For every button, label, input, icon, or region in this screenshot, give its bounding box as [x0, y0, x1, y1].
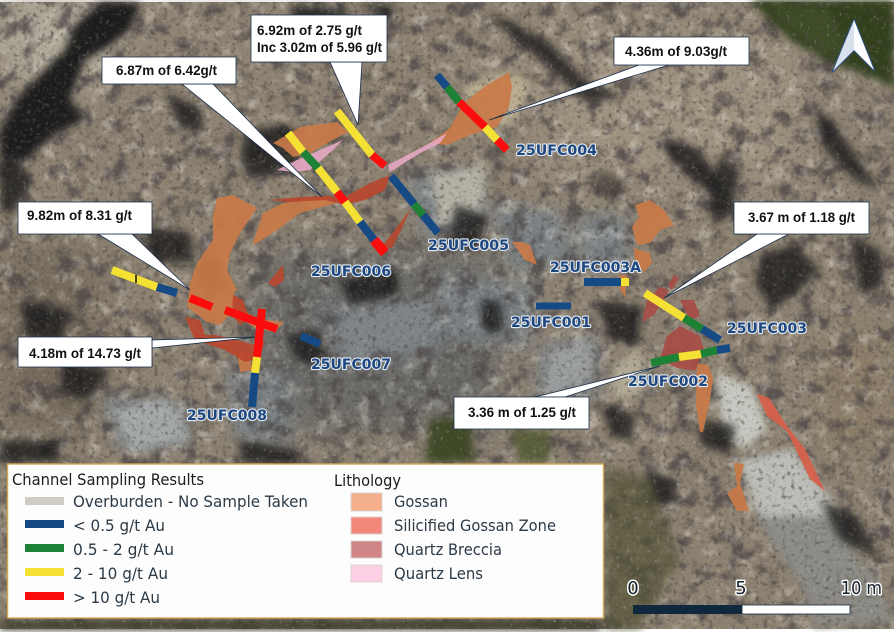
label 25UFC001: 25UFC001: [511, 315, 591, 331]
callout: 6.87m of 6.42g/t: [102, 57, 236, 84]
legend: under 0.5 g/t: < 0.5 g/t Au: [73, 516, 165, 535]
quartz breccia: [642, 275, 704, 371]
scale label 5: 5: [735, 578, 747, 599]
callout: 9.82m of 8.31 g/t: [18, 202, 152, 234]
channel 25UFC004: [437, 75, 507, 150]
gossan zones: [187, 72, 749, 511]
label 25UFC006: 25UFC006: [311, 264, 391, 280]
callout: 6.87m of 6.42g/t: 6.87m of 6.42g/t: [116, 62, 217, 78]
silicified gossan zones: [185, 175, 825, 491]
legend: quartz breccia: Quartz Breccia: [394, 540, 502, 559]
callout: 6.92m of 2.75 g/t: [251, 15, 387, 62]
legend: gossan: [351, 492, 448, 511]
legend: 0.5 to 2 g/t: [25, 540, 174, 559]
callout: 9.82m of 8.31 g/t: 9.82m of 8.31 g/t: [27, 207, 132, 223]
label 25UFC003A: 25UFC003A: [550, 260, 641, 276]
callout: 3.36 m of 1.25 g/t: 3.36 m of 1.25 g/t: [468, 404, 576, 420]
tail: 4.18m: [152, 337, 257, 348]
quartz lens: [277, 133, 447, 172]
label 25UFC003: 25UFC003: [727, 321, 807, 337]
legend: overburden: Overburden - No Sample Taken: [73, 492, 308, 511]
callout tails: [98, 62, 789, 397]
legend: 0.5 to 2 g/t: 0.5 - 2 g/t Au: [73, 540, 174, 559]
legend: 2 to 10 g/t: 2 - 10 g/t Au: [73, 564, 168, 583]
legend: gossan: Gossan: [394, 492, 448, 511]
channel 25UFC001: [536, 302, 571, 310]
callout: 3.67 m of 1.18 g/t: [734, 202, 869, 234]
callout: 4.36m of 9.03g/t: 4.36m of 9.03g/t: [625, 43, 727, 59]
channel labels: [187, 143, 807, 424]
callout: 6.92m of 2.75 g/t: 6.92m of 2.75 g/t: [257, 22, 362, 38]
callout: 3.67 m of 1.18 g/t: 3.67 m of 1.18 g/t: [748, 209, 855, 225]
heading: lithology: Lithology: [334, 471, 401, 490]
callout: 4.18m of 14.73 g/t: 4.18m of 14.73 g/t: [29, 345, 141, 361]
channel 25UFC007: [301, 336, 320, 344]
channel 25UFC003: [645, 293, 720, 340]
legend: quartz breccia: [351, 540, 502, 559]
channel sample lines: [112, 75, 730, 407]
label 25UFC008: 25UFC008: [187, 408, 267, 424]
icon: north arrow: [833, 20, 874, 71]
legend: 2 to 10 g/t: [25, 564, 168, 583]
tail: 6.92m: [330, 62, 362, 125]
channel 25UFC005: [337, 111, 438, 233]
tail: 6.87m: [182, 84, 322, 197]
lithology polygons: [185, 72, 825, 511]
legend: quartz lens: [351, 564, 483, 583]
scale label 10 m: 10 m: [841, 578, 882, 599]
label 25UFC007: 25UFC007: [311, 357, 391, 373]
channel 25UFC003A: [584, 278, 629, 286]
scale bar: [627, 578, 882, 614]
callout: 4.36m of 9.03g/t: [614, 37, 749, 65]
callout: 6.92m of 2.75 g/t: Inc 3.02m of 5.96 g/t: [257, 39, 382, 55]
label 25UFC004: 25UFC004: [516, 143, 597, 159]
panel: legend: [8, 464, 604, 618]
scale label 0: 0: [627, 578, 639, 599]
tail: 3.36m: [535, 366, 660, 397]
callout: 3.36 m of 1.25 g/t: [454, 397, 589, 429]
tail: 4.36m: [489, 65, 669, 120]
legend: over 10 g/t: [25, 588, 160, 607]
legend: under 0.5 g/t: [25, 516, 165, 535]
tail: 3.67m: [664, 234, 789, 298]
label 25UFC002: 25UFC002: [628, 374, 708, 390]
legend: silicified gossan zone: Silicified Gossan Zone: [394, 516, 556, 535]
channel 25UFC006: [288, 133, 385, 253]
callout: 4.18m of 14.73 g/t: [18, 337, 152, 367]
tail: 9.82m: [98, 234, 190, 290]
channel 25UFC002: [651, 348, 730, 363]
callout boxes: [18, 15, 869, 429]
legend: quartz lens: Quartz Lens: [394, 564, 483, 583]
heading: channel sampling results: Channel Sampling Results: [12, 470, 204, 489]
label 25UFC005: 25UFC005: [428, 238, 509, 254]
channel west of 25UFC008: [112, 270, 277, 329]
channel 25UFC008: [252, 309, 262, 407]
legend: over 10 g/t: > 10 g/t Au: [73, 588, 160, 607]
